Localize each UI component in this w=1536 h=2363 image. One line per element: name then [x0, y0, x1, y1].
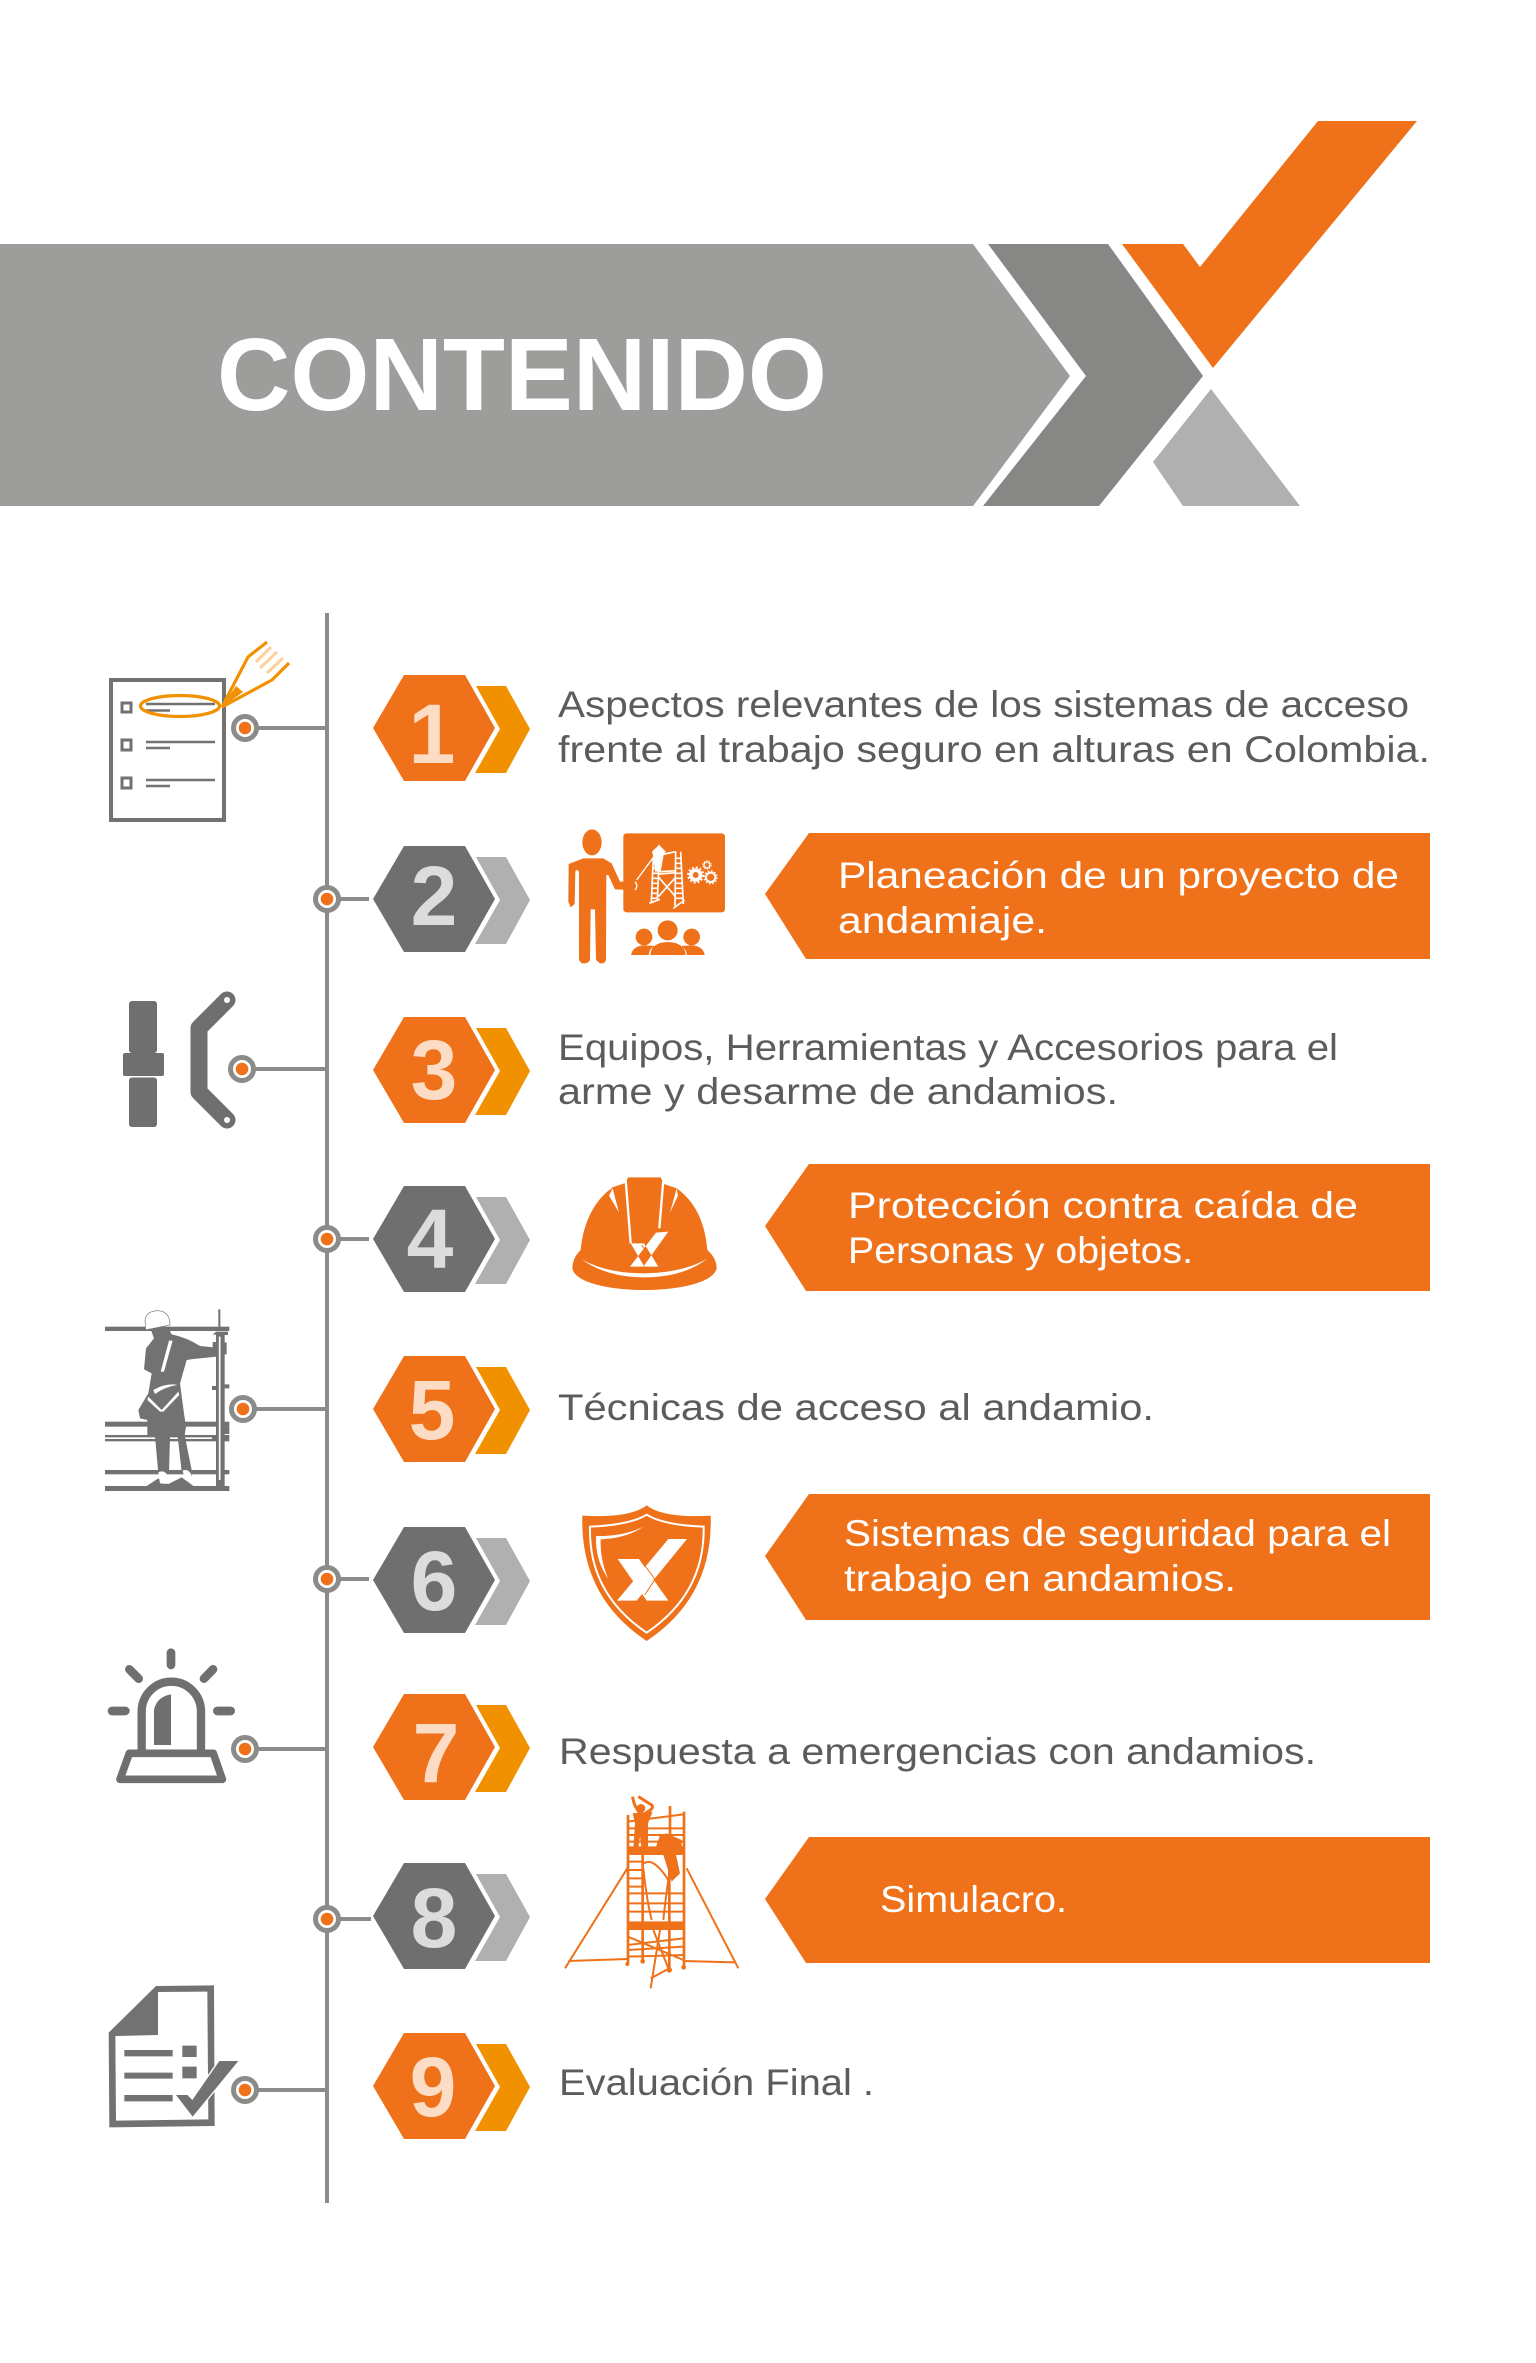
item 8 panel	[765, 1837, 1430, 1963]
icon: evaluation document with check	[109, 1985, 238, 2127]
number badge 4	[373, 1186, 530, 1292]
timeline node 2	[316, 888, 338, 910]
icon: instructor presenting scaffold	[568, 829, 725, 963]
timeline node 1	[234, 716, 256, 740]
item 5 text: Técnicas de acceso al andamio.	[558, 1387, 1154, 1428]
timeline node 3	[230, 1058, 254, 1080]
number badge 5: 5	[409, 1363, 455, 1457]
item 6 panel	[765, 1494, 1430, 1620]
icon: scaffold tower with workers	[565, 1797, 738, 1988]
item 4 panel: Protección contra caída de	[848, 1185, 1358, 1226]
item 4 panel	[765, 1164, 1430, 1291]
header banner	[0, 121, 1417, 506]
number badge 7	[373, 1694, 530, 1800]
item 3 text	[558, 1027, 1338, 1112]
number badge 7: 7	[413, 1706, 459, 1800]
item 8 panel: Simulacro.	[880, 1879, 1067, 1920]
dark chevron	[983, 244, 1203, 506]
number badge 9: 9	[410, 2040, 456, 2134]
item 9 text: Evaluación Final .	[559, 2062, 874, 2103]
timeline node 6	[316, 1568, 338, 1590]
number badge 6: 6	[411, 1534, 457, 1628]
icon: safety helmet	[572, 1177, 717, 1290]
item 1 text: Aspectos relevantes de los sistemas de acceso	[558, 684, 1409, 725]
icon: worker on scaffold	[105, 1309, 229, 1491]
icon: emergency siren	[112, 1653, 231, 1779]
icon: safety shield	[582, 1505, 711, 1641]
item 1 text: frente al trabajo seguro en alturas en Colombia.	[558, 729, 1430, 770]
item 4 panel: Personas y objetos.	[848, 1230, 1193, 1271]
number badge 8: 8	[411, 1871, 457, 1965]
timeline	[230, 613, 371, 2203]
number badge 3: 3	[411, 1023, 457, 1117]
orange check mark	[1122, 121, 1417, 368]
item 2 panel: Planeación de un proyecto de	[838, 855, 1399, 896]
icon: checklist with pencil	[111, 642, 289, 820]
light triangle	[1153, 389, 1300, 506]
number badge 4: 4	[407, 1192, 454, 1286]
number badge 1: 1	[409, 687, 455, 781]
banner bar	[0, 244, 1070, 506]
item 7 text: Respuesta a emergencias con andamios.	[559, 1731, 1316, 1772]
timeline node 8	[316, 1908, 338, 1930]
icon: scaffold tube and bracket	[123, 997, 230, 1127]
item 6 panel: trabajo en andamios.	[844, 1558, 1236, 1599]
item 1 text	[558, 684, 1430, 770]
number badge 2	[373, 846, 530, 952]
item 3 text: Equipos, Herramientas y Accesorios para el	[558, 1027, 1338, 1068]
number badge 3	[373, 1017, 530, 1123]
item 6 panel: Sistemas de seguridad para el	[844, 1513, 1391, 1554]
item 3 text: arme y desarme de andamios.	[558, 1071, 1118, 1112]
item 2 panel	[765, 833, 1430, 959]
number badge 2: 2	[411, 849, 457, 943]
number badge 5	[373, 1356, 530, 1462]
timeline node 5	[232, 1398, 254, 1420]
timeline node 9	[234, 2078, 256, 2102]
number badge 8	[373, 1863, 530, 1969]
item 2 panel: andamiaje.	[838, 900, 1047, 941]
number badge 6	[373, 1527, 530, 1633]
title: CONTENIDO	[217, 317, 827, 432]
number badge 9	[373, 2033, 530, 2139]
timeline node 7	[234, 1738, 256, 1760]
number badge 1	[373, 675, 530, 781]
timeline node 4	[316, 1228, 338, 1250]
